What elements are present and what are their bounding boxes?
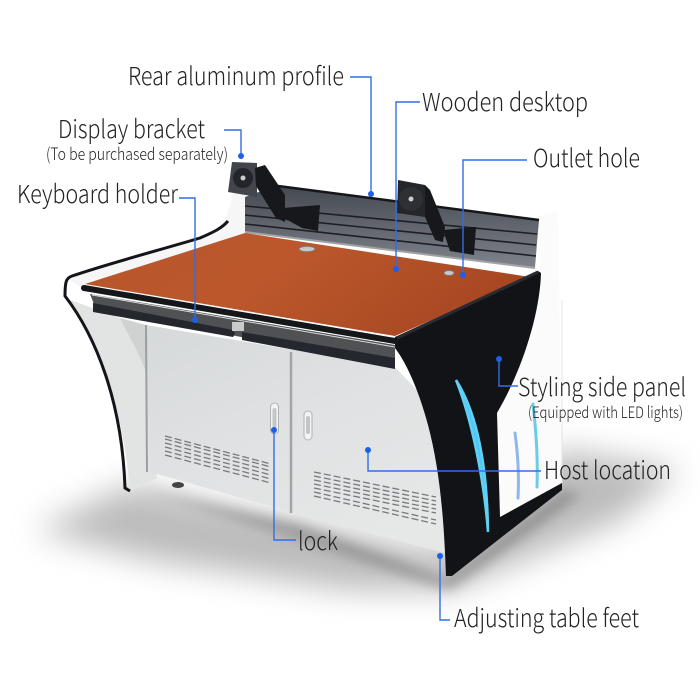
outlet holes [299,246,454,276]
rear aluminum slat wall [245,185,539,268]
wooden desktop [85,233,530,336]
keyboard holder left [93,303,235,337]
right monitor bracket [397,180,476,255]
side panel top edge [397,272,538,338]
cabinet front [146,325,452,555]
desktop edge highlight [92,295,395,347]
bracket between keyboard holders [232,322,244,331]
black styling side panel [395,271,562,576]
label: adjusting table feet: Adjusting table feet [454,599,639,635]
label: keyboard holder: Keyboard holder [17,175,179,211]
floor shadow [35,450,680,590]
foot [172,482,184,488]
label: wooden desktop: Wooden desktop [422,83,588,119]
right panel edge [561,300,563,483]
label: wooden desktop [393,83,588,272]
label: host location [365,447,671,487]
label: adjusting table feet [437,553,639,635]
LED strips small [515,404,537,498]
label: lock: lock [298,522,338,558]
label: display bracket: (To be purchased separately) [46,140,228,165]
right rear white panel [497,211,562,517]
label: rear aluminum profile [128,57,374,197]
label: styling side panel [496,356,686,423]
keyboard holder right [242,332,395,369]
door locks [270,403,312,440]
label: host location: Host location [544,451,671,487]
left monitor bracket [228,162,320,231]
desktop front edge [84,288,395,341]
vent left [165,436,271,483]
under-desk shadow [90,294,395,366]
label: rear aluminum profile: Rear aluminum profile [128,57,344,93]
desk photo [35,162,680,590]
label: outlet hole: Outlet hole [533,139,640,175]
label: display bracket: Display bracket [58,110,205,146]
vent right [314,472,436,524]
left side panel [65,192,245,491]
LED strip main [456,380,488,532]
label: keyboard holder [17,175,198,323]
label: lock [271,427,338,558]
label: display bracket [46,110,244,165]
label: outlet hole [460,139,640,278]
